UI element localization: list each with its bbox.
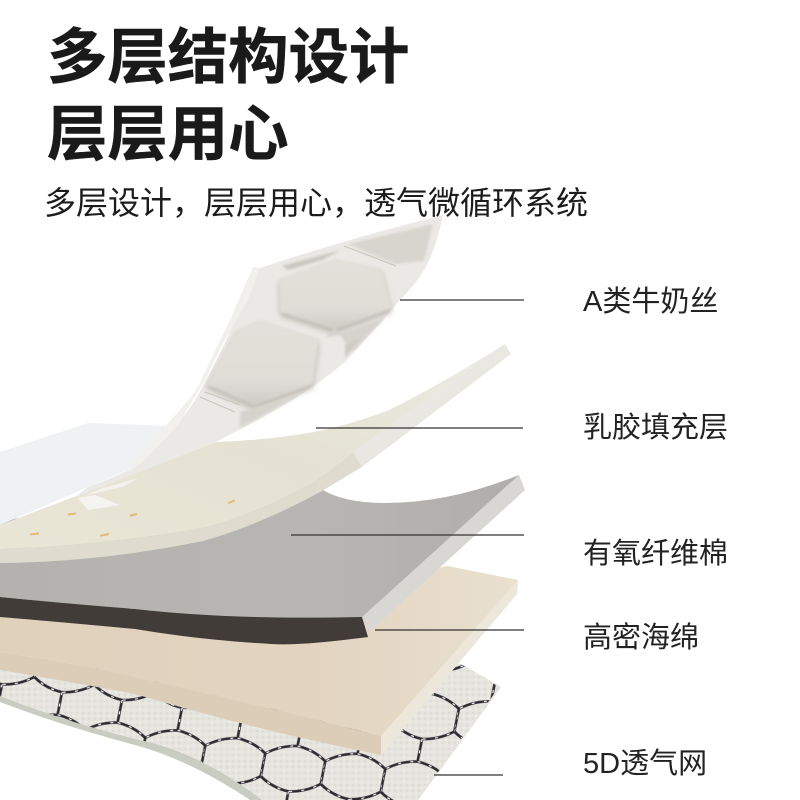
subtitle: 多层设计，层层用心，透气微循环系统 — [44, 185, 588, 221]
label: fiber cotton: 有氧纤维棉 — [583, 538, 728, 570]
stitch seams — [200, 246, 396, 412]
layer: latex filling — [0, 344, 511, 563]
title line 2: 层层用心 — [47, 100, 289, 168]
leader lines — [291, 300, 524, 775]
layer: high density foam — [0, 566, 518, 755]
label: foam: 高密海绵 — [583, 622, 699, 654]
label: mesh: 5D透气网 — [583, 748, 707, 780]
title line 1: 多层结构设计 — [47, 23, 409, 91]
fold pieces — [84, 478, 138, 496]
label: latex: 乳胶填充层 — [583, 412, 728, 444]
dark foam edge — [0, 597, 368, 644]
hexagon panels — [206, 224, 433, 428]
label: A milk silk: A类牛奶丝 — [583, 286, 718, 318]
quilted top — [74, 215, 443, 498]
layer: oxygen fiber cotton — [0, 475, 525, 644]
layer: A-class milk silk fabric — [0, 215, 443, 525]
white underside — [0, 423, 172, 525]
layer: 5D breathable mesh — [0, 664, 501, 800]
